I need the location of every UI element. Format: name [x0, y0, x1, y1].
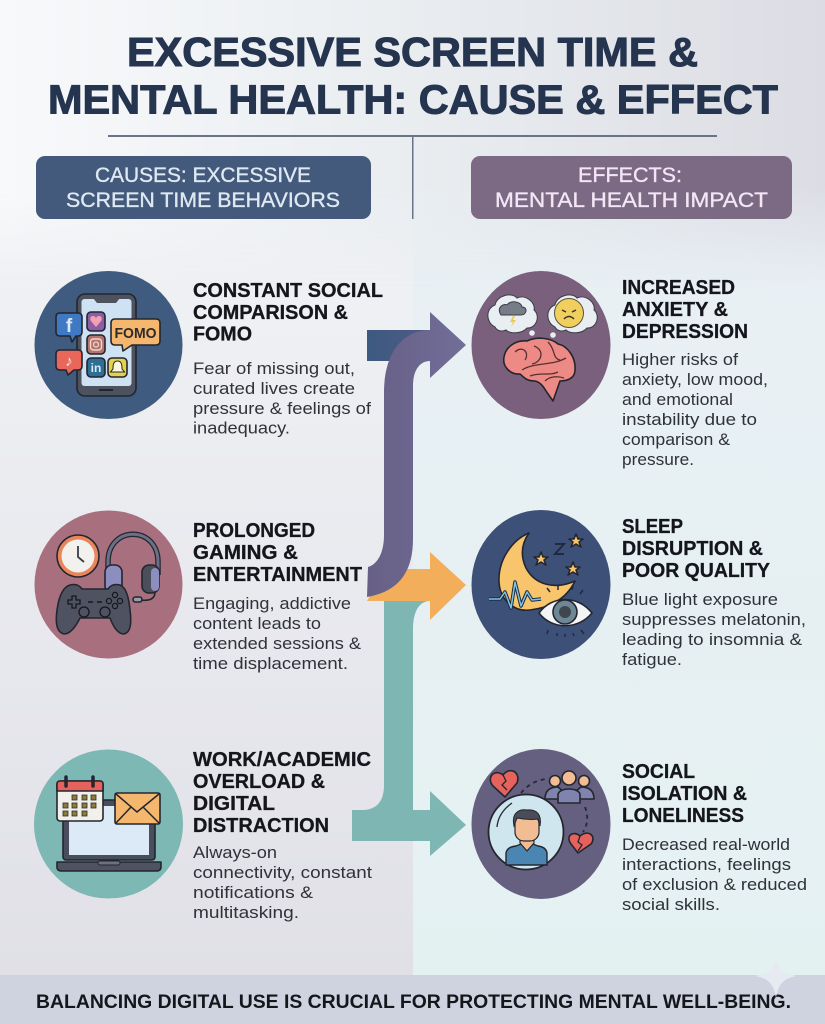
cause 2 text: extended sessions &: [193, 635, 361, 653]
effect 1 text: [622, 277, 768, 469]
cause 1 text: curated lives create: [193, 380, 355, 398]
cause 1 text: Fear of missing out,: [193, 360, 355, 378]
cause 1: [34, 271, 383, 438]
effect 3 text: interactions, feelings: [622, 856, 791, 874]
icon: phone with social apps and FOMO: f: [66, 316, 73, 337]
cause 3 text: multitasking.: [193, 904, 299, 922]
effect 2 text: fatigue.: [622, 651, 682, 669]
icon: moon, stars, pulse and eye: [472, 510, 610, 659]
cause 3: [34, 749, 372, 922]
cause 1 text: COMPARISON &: [193, 302, 348, 324]
heading: effects: MENTAL HEALTH IMPACT: [495, 189, 768, 212]
effect 3 text: LONELINESS: [622, 805, 744, 827]
effect 2 text: DISRUPTION &: [622, 538, 763, 560]
cause 1 text: FOMO: [193, 324, 252, 346]
effect 2 text: SLEEP: [622, 516, 683, 538]
effect 1 text: Higher risks of: [622, 351, 738, 369]
cause 1 text: pressure & feelings of: [193, 400, 371, 418]
icon: clock, headset and game controller: [34, 510, 182, 658]
heading: effects: EFFECTS:: [578, 164, 682, 187]
effect 1 text: pressure.: [622, 451, 694, 469]
cause 2 text: PROLONGED: [193, 520, 315, 542]
cause 2: [34, 510, 362, 673]
footer banner: [0, 975, 825, 1024]
effect 1 text: INCREASED: [622, 277, 735, 299]
cause 2 text: GAMING &: [193, 542, 298, 564]
cause 2 text: Engaging, addictive: [193, 595, 351, 613]
effect 3 text: of exclusion & reduced: [622, 876, 807, 894]
effect 3: [472, 749, 807, 914]
effect 1 text: and emotional: [622, 391, 733, 409]
icon: phone with social apps and FOMO: ♪: [65, 353, 73, 370]
icon: person in bubble, broken hearts and group: [472, 749, 610, 899]
effect 1 text: DEPRESSION: [622, 321, 748, 343]
cause 1 text: inadequacy.: [193, 420, 290, 438]
heading: causes: CAUSES: EXCESSIVE: [95, 164, 311, 187]
cause 1 text: CONSTANT SOCIAL: [193, 280, 383, 302]
icon: phone with social apps and FOMO: FOMO: [114, 325, 157, 342]
effect 1 text: ANXIETY &: [622, 299, 728, 321]
cause 3 text: Always-on: [193, 844, 277, 862]
cause 3 text: DIGITAL: [193, 793, 275, 815]
title: EXCESSIVE SCREEN TIME &: [127, 29, 698, 75]
heading: causes: SCREEN TIME BEHAVIORS: [66, 189, 340, 212]
arrow: anxiety purple: [367, 312, 466, 597]
cause 3 text: notifications &: [193, 884, 313, 902]
icon: phone with social apps and FOMO: [34, 271, 182, 419]
effect 2: [472, 510, 806, 669]
effect 2 text: Blue light exposure: [622, 591, 778, 609]
effect 3 text: [622, 761, 807, 914]
effect 3 text: social skills.: [622, 896, 720, 914]
effect 1 text: instability due to: [622, 411, 757, 429]
cause 2 text: ENTERTAINMENT: [193, 564, 362, 586]
arrow: social comparison to anxiety (dark stem): [367, 330, 430, 361]
icon: phone with social apps and FOMO: in: [91, 361, 101, 375]
effect 3 text: SOCIAL: [622, 761, 695, 783]
effect 3 text: Decreased real-world: [622, 836, 790, 854]
footer banner: BALANCING DIGITAL USE IS CRUCIAL FOR PROTECTING MENTAL WELL-BEING.: [36, 991, 791, 1013]
icon: sparkle: [755, 958, 797, 998]
cause 3 text: DISTRACTION: [193, 815, 329, 837]
icon: brain with storm cloud and sad face: [472, 271, 610, 419]
effect 2 text: suppresses melatonin,: [622, 611, 806, 629]
cause 2 text: time displacement.: [193, 655, 348, 673]
cause 2 text: [193, 520, 362, 673]
cause 2 text: content leads to: [193, 615, 321, 633]
effect 2 text: [622, 516, 806, 669]
title: [48, 29, 778, 122]
effect 2 text: leading to insomnia &: [622, 631, 802, 649]
cause 3 text: connectivity, constant: [193, 864, 372, 882]
cause 1 text: [193, 280, 383, 438]
cause 3 text: [193, 749, 372, 922]
cause 3 text: OVERLOAD &: [193, 771, 325, 793]
arrow: gaming to sleep (orange): [367, 552, 466, 620]
effect 1 text: comparison &: [622, 431, 730, 449]
title: MENTAL HEALTH: CAUSE & EFFECT: [48, 76, 778, 122]
effect 1 text: anxiety, low mood,: [622, 371, 768, 389]
heading: causes: [36, 156, 371, 219]
effect 1: [472, 271, 768, 469]
arrow: work overload to isolation (teal): [352, 601, 466, 856]
icon: laptop, calendar and envelope: [34, 750, 183, 898]
cause 3 text: WORK/ACADEMIC: [193, 749, 371, 771]
effect 3 text: ISOLATION &: [622, 783, 747, 805]
heading: effects: [471, 156, 792, 219]
effect 2 text: POOR QUALITY: [622, 560, 771, 582]
